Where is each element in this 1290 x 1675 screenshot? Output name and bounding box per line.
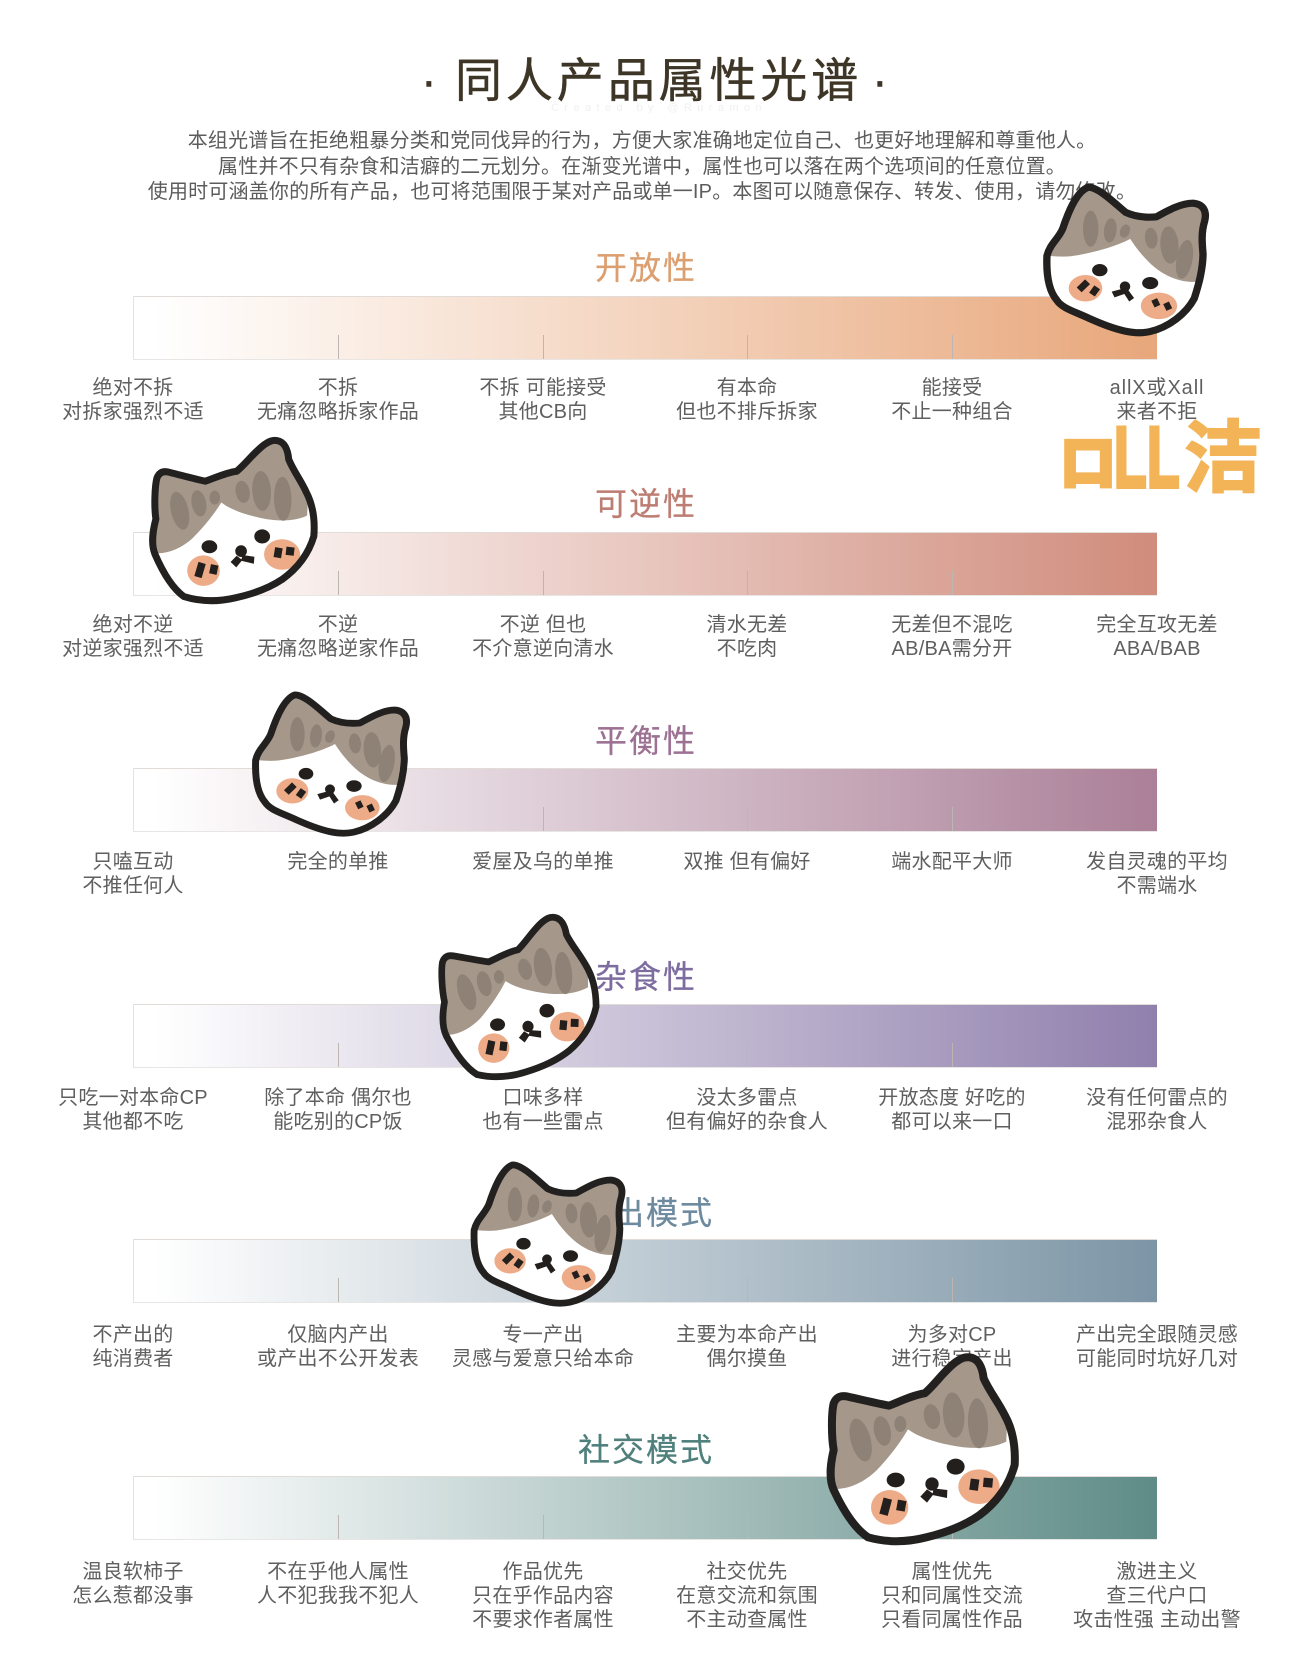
label 5: 只和同属性交流 <box>881 1585 1023 1607</box>
panel: 杂食性 <box>58 959 1228 1133</box>
gradient bar: 开放性 <box>133 296 1157 360</box>
label 2: 无痛忽略逆家作品 <box>257 638 419 660</box>
label 1: 其他都不吃 <box>82 1111 184 1133</box>
watermark credit: Created by @Ruramon <box>551 102 767 114</box>
label 6 <box>1086 1087 1228 1133</box>
label 5: 为多对CP <box>907 1324 997 1346</box>
label 1: 不推任何人 <box>82 875 184 897</box>
label 6: 没有任何雷点的 <box>1086 1087 1228 1109</box>
label 2: 或产出不公开发表 <box>257 1348 419 1370</box>
panel: 可逆性 <box>62 486 1218 660</box>
label 5 <box>881 1561 1023 1631</box>
label 1: 只吃一对本命CP <box>58 1087 208 1109</box>
label 2: 完全的单推 <box>287 851 389 873</box>
label 1 <box>62 376 204 423</box>
label 6 <box>1110 377 1204 423</box>
label 5: 端水配平大师 <box>891 851 1013 873</box>
label 1 <box>62 614 204 660</box>
label 3: 灵感与爱意只给本命 <box>452 1348 634 1370</box>
icon: cat marker on 社交模式 <box>831 1357 1015 1541</box>
wordmark: orange sticker text: 口 <box>1061 419 1115 498</box>
label 6 <box>1086 851 1228 897</box>
title: 同人产品属性光谱 <box>455 54 862 107</box>
label 2: 仅脑内产出 <box>287 1324 389 1346</box>
label 1 <box>72 1560 194 1607</box>
label 6: 可能同时坑好几对 <box>1076 1348 1238 1370</box>
label 4: 偶尔摸鱼 <box>706 1348 788 1370</box>
label 4: 但有偏好的杂食人 <box>666 1111 828 1133</box>
label 5: AB/BA需分开 <box>892 638 1012 660</box>
label 3: 不逆 但也 <box>500 614 586 636</box>
label 5 <box>891 377 1013 423</box>
label 6: 查三代户口 <box>1106 1585 1208 1607</box>
label 4 <box>666 1087 828 1133</box>
icon: cat marker on 产出模式 <box>474 1165 622 1303</box>
label 2: 除了本命 偶尔也 <box>264 1087 412 1109</box>
label 5: 属性优先 <box>912 1561 992 1583</box>
wordmark: orange sticker text: 洁 <box>1184 396 1262 508</box>
label 4: 清水无差 <box>706 614 788 636</box>
label 4 <box>676 1324 818 1370</box>
label 5 <box>891 614 1013 660</box>
label 6: 来者不拒 <box>1116 401 1198 423</box>
heading: 杂食性: 杂食性 <box>595 959 697 995</box>
label 6: 不需端水 <box>1116 875 1198 897</box>
label 5: 进行稳定产出 <box>891 1348 1013 1370</box>
heading: 产出模式: 产出模式 <box>578 1195 714 1231</box>
label 2 <box>257 614 419 660</box>
label 4: 双推 但有偏好 <box>683 851 811 873</box>
label 4: 没太多雷点 <box>696 1087 798 1109</box>
intro text: 使用时可涵盖你的所有产品，也可将范围限于某对产品或单一IP。本图可以随意保存、转发、使用，请勿修改。 <box>148 181 1136 203</box>
label 1: 纯消费者 <box>92 1348 174 1370</box>
label 1 <box>82 851 184 897</box>
label 3: 爱屋及乌的单推 <box>472 851 614 873</box>
label 6: allX或Xall <box>1110 377 1204 399</box>
label 2 <box>264 1086 412 1133</box>
label 4 <box>676 376 818 423</box>
label 3: 不介意逆向清水 <box>472 638 614 660</box>
label 2: 不拆 <box>318 377 358 399</box>
label 2 <box>257 377 419 423</box>
label 1: 对拆家强烈不适 <box>62 401 204 423</box>
label 5: 开放态度 好吃的 <box>878 1087 1026 1109</box>
label 3 <box>482 1087 604 1133</box>
intro text: 属性并不只有杂食和洁癖的二元划分。在渐变光谱中，属性也可以落在两个选项间的任意位置。 <box>218 156 1066 178</box>
label 1: 绝对不逆 <box>92 614 174 636</box>
wordmark: orange sticker text: L <box>1114 410 1147 506</box>
icon: cat marker on 杂食性 <box>438 915 600 1079</box>
label 4: 不主动查属性 <box>686 1609 808 1631</box>
label 5: 只看同属性作品 <box>881 1609 1023 1631</box>
label 4 <box>676 1560 818 1631</box>
label 3 <box>472 614 614 660</box>
label 5 <box>891 1324 1013 1370</box>
label 2 <box>257 1561 419 1607</box>
label 4: 社交优先 <box>706 1561 788 1583</box>
label 3: 不要求作者属性 <box>472 1609 614 1631</box>
label 1: 对逆家强烈不适 <box>62 638 204 660</box>
label 4 <box>706 614 788 660</box>
label 6: ABA/BAB <box>1113 638 1201 660</box>
label 2: 不逆 <box>318 614 358 636</box>
heading: 开放性: 开放性 <box>595 250 697 286</box>
label 6 <box>1096 614 1218 660</box>
label 1 <box>92 1324 174 1370</box>
label 4: 不吃肉 <box>717 638 777 660</box>
label 5: 能接受 <box>922 377 982 399</box>
label 3: 口味多样 <box>502 1087 584 1109</box>
wordmark: orange sticker text <box>1061 396 1262 508</box>
panel: 社交模式 <box>72 1432 1241 1631</box>
label 4: 主要为本命产出 <box>676 1324 818 1346</box>
label 3: 也有一些雷点 <box>482 1111 604 1133</box>
label 6 <box>1076 1324 1238 1370</box>
gradient bar: 产出模式 <box>133 1239 1157 1303</box>
label 4: 在意交流和氛围 <box>676 1585 818 1607</box>
wordmark: orange sticker text: L <box>1147 410 1180 506</box>
gradient bar: 杂食性 <box>133 1004 1157 1068</box>
label 6: 混邪杂食人 <box>1106 1111 1208 1133</box>
intro text: 本组光谱旨在拒绝粗暴分类和党同伐异的行为，方便大家准确地定位自己、也更好地理解和尊重他人。 <box>188 130 1096 152</box>
label 4: 有本命 <box>717 377 777 399</box>
label 2: 无痛忽略拆家作品 <box>257 401 419 423</box>
label 1: 温良软柿子 <box>82 1561 184 1583</box>
label 5: 无差但不混吃 <box>891 614 1013 636</box>
intro text <box>148 130 1136 203</box>
label 2: 不在乎他人属性 <box>267 1561 409 1583</box>
label 1: 不产出的 <box>92 1324 174 1346</box>
icon: cat marker on 平衡性 <box>256 695 407 833</box>
label 6: 攻击性强 主动出警 <box>1073 1609 1241 1631</box>
label 3: 专一产出 <box>502 1324 584 1346</box>
gradient bar: 社交模式 <box>133 1476 1157 1540</box>
label 3 <box>452 1324 634 1370</box>
label 3: 作品优先 <box>502 1561 584 1583</box>
label 2 <box>257 1324 419 1370</box>
label 6: 激进主义 <box>1116 1561 1198 1583</box>
label 6 <box>1073 1561 1241 1631</box>
label 3: 不拆 可能接受 <box>479 377 607 399</box>
heading: 平衡性: 平衡性 <box>595 723 697 759</box>
label 3: 其他CB向 <box>498 401 588 423</box>
gradient bar: 可逆性 <box>133 532 1157 596</box>
panel: 产出模式 <box>92 1195 1238 1370</box>
label 3 <box>479 377 607 423</box>
label 6: 发自灵魂的平均 <box>1086 851 1228 873</box>
title: · <box>872 54 888 107</box>
label 2: 能吃别的CP饭 <box>273 1111 403 1133</box>
label 1: 只嗑互动 <box>92 851 174 873</box>
heading: 可逆性: 可逆性 <box>595 486 697 522</box>
panel: 平衡性 <box>82 723 1228 897</box>
icon: cat marker on 可逆性 <box>151 437 316 603</box>
label 5 <box>878 1087 1026 1133</box>
panel: 开放性 <box>62 250 1204 423</box>
label 4: 但也不排斥拆家 <box>676 401 818 423</box>
label 1: 怎么惹都没事 <box>72 1585 194 1607</box>
label 1 <box>58 1087 208 1133</box>
label 2: 人不犯我我不犯人 <box>257 1585 419 1607</box>
title: · <box>421 54 437 107</box>
label 3: 只在乎作品内容 <box>472 1585 614 1607</box>
label 1: 绝对不拆 <box>92 377 174 399</box>
heading: 社交模式: 社交模式 <box>578 1432 714 1468</box>
label 6: 完全互攻无差 <box>1096 614 1218 636</box>
icon: cat marker on 开放性 <box>1047 187 1205 333</box>
label 5: 都可以来一口 <box>891 1111 1013 1133</box>
label 5: 不止一种组合 <box>891 401 1013 423</box>
label 3 <box>472 1561 614 1631</box>
gradient bar: 平衡性 <box>133 768 1157 832</box>
label 6: 产出完全跟随灵感 <box>1076 1324 1238 1346</box>
